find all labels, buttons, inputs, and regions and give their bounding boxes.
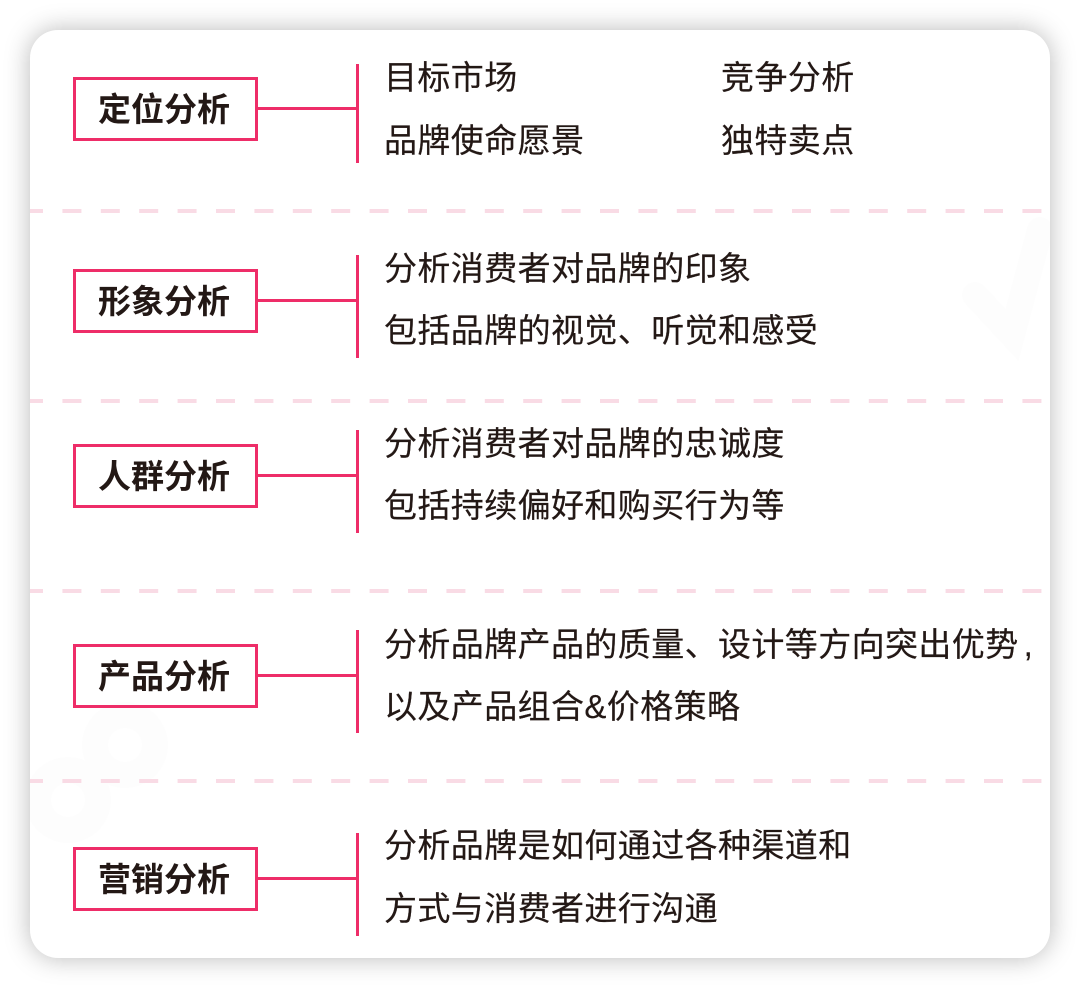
section: 人群分析	[73, 425, 785, 533]
label box: 营销分析	[98, 861, 230, 898]
text line 2: 包括品牌的视觉、听觉和感受	[384, 312, 818, 349]
label box: 产品分析	[98, 658, 230, 695]
label box: 人群分析	[98, 458, 230, 495]
connector	[258, 474, 358, 477]
text: 独特卖点: 独特卖点	[721, 122, 855, 159]
label box	[73, 77, 258, 141]
label box	[73, 644, 258, 708]
bracket line	[356, 833, 359, 936]
connector	[258, 299, 358, 302]
text line 2: 包括持续偏好和购买行为等	[384, 487, 785, 524]
connector	[258, 877, 358, 880]
bracket line	[356, 255, 359, 358]
text line 1: 分析品牌产品的质量、设计等方向突出优势,	[384, 626, 1033, 663]
section: 产品分析	[73, 626, 1033, 733]
text line 2: 方式与消费者进行沟通	[384, 890, 718, 927]
text: 品牌使命愿景: 品牌使命愿景	[384, 122, 584, 159]
label box	[73, 269, 258, 333]
label box	[73, 847, 258, 911]
text: 目标市场: 目标市场	[384, 59, 518, 96]
connector	[258, 107, 358, 110]
text line 1: 分析消费者对品牌的忠诚度	[384, 425, 785, 462]
text: 竞争分析: 竞争分析	[721, 59, 855, 96]
bracket line	[356, 64, 359, 163]
text line 1: 分析品牌是如何通过各种渠道和	[384, 827, 852, 864]
section: 形象分析	[73, 250, 818, 358]
text line 2: 以及产品组合&价格策略	[384, 688, 740, 725]
text line 1: 分析消费者对品牌的印象	[384, 250, 751, 287]
label box: 形象分析	[98, 283, 230, 320]
label box	[73, 444, 258, 508]
section: 营销分析	[73, 827, 852, 936]
bracket line	[356, 430, 359, 533]
bracket line	[356, 630, 359, 733]
section: 定位分析	[73, 59, 855, 163]
connector	[258, 674, 358, 677]
label box: 定位分析	[98, 91, 230, 128]
